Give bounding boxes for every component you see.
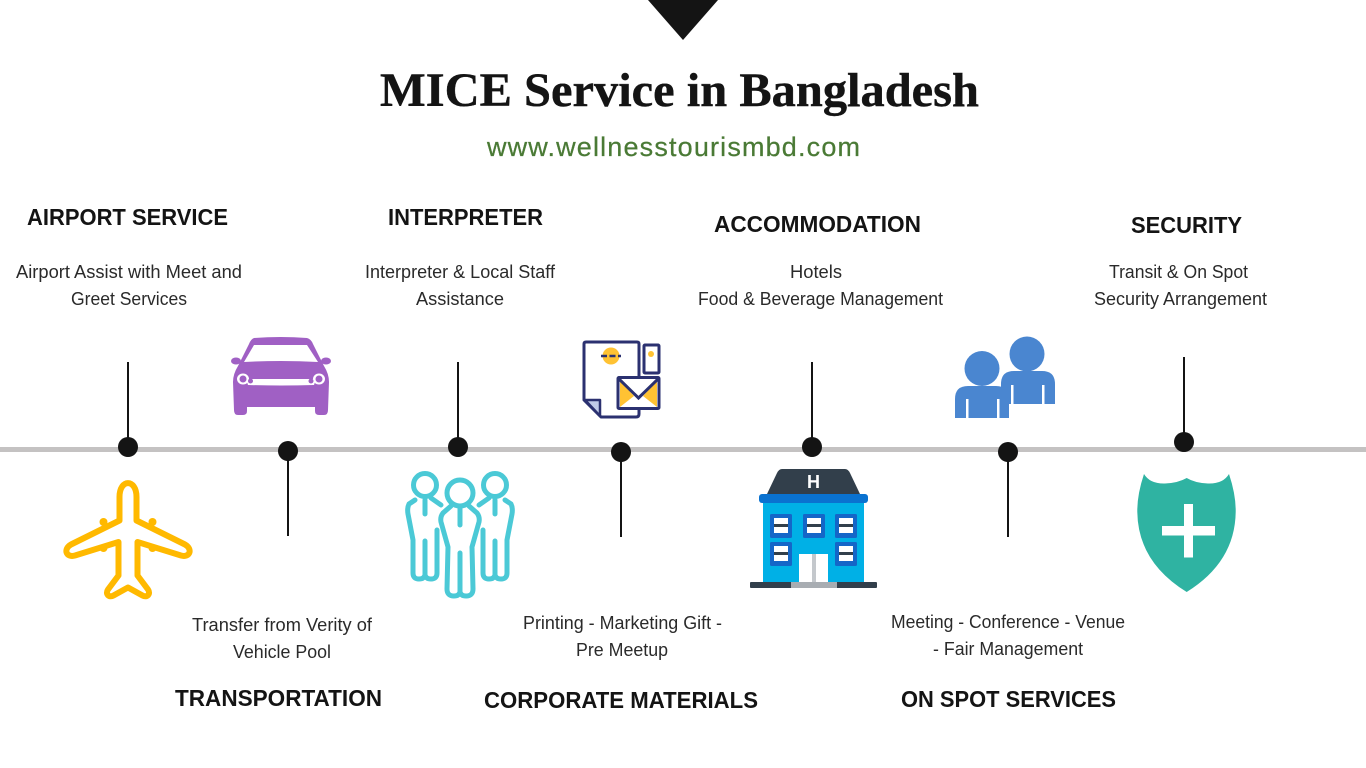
panel: security (1094, 212, 1267, 592)
text: corporate materials description (523, 613, 722, 660)
heading: airport service: AIRPORT SERVICE (27, 204, 228, 230)
timeline marker: on spot services (998, 442, 1018, 537)
timeline marker: transportation (278, 441, 298, 536)
heading: interpreter: INTERPRETER (388, 204, 543, 230)
text: on spot services description (891, 612, 1125, 659)
timeline marker: corporate materials (611, 442, 631, 537)
timeline marker: interpreter (448, 362, 468, 457)
panel: interpreter (365, 204, 556, 596)
text: transportation description: Vehicle Pool (233, 642, 331, 662)
text: corporate materials description: Pre Meetup (576, 640, 668, 660)
icon: hotel building: H (807, 472, 820, 492)
text: on spot services description: Meeting - Conference - Venue (891, 612, 1125, 632)
icon: group of people (408, 474, 512, 596)
top triangle marker (648, 0, 718, 40)
text: airport service description: Greet Services (71, 289, 187, 309)
heading: corporate materials: CORPORATE MATERIALS (484, 687, 758, 713)
text: transportation description (192, 615, 373, 662)
website url: www.wellnesstourismbd.com (486, 132, 860, 162)
timeline marker: accommodation (802, 362, 822, 457)
text: corporate materials description: Printing - Marketing Gift - (523, 613, 722, 633)
text: security description: Transit & On Spot (1109, 262, 1248, 282)
text: airport service description: Airport Assist with Meet and (16, 262, 242, 282)
text: interpreter description: Interpreter & Local Staff (365, 262, 556, 282)
panel: accommodation (698, 211, 943, 588)
panel: on spot services (891, 336, 1125, 712)
heading: on spot services: ON SPOT SERVICES (901, 686, 1116, 712)
text: on spot services description: - Fair Management (933, 639, 1083, 659)
timeline bar (0, 447, 1366, 452)
panel: transportation (175, 337, 382, 711)
text: interpreter description: Assistance (416, 289, 504, 309)
text: accommodation description: Hotels (790, 262, 842, 282)
heading: transportation: TRANSPORTATION (175, 685, 382, 711)
heading: accommodation: ACCOMMODATION (714, 211, 921, 237)
text: airport service description (16, 262, 242, 309)
icon: stationery and envelope (584, 342, 659, 417)
icon: shield with cross (1137, 474, 1236, 592)
panel: corporate materials (484, 342, 758, 713)
heading: security: SECURITY (1131, 212, 1242, 238)
text: accommodation description: Food & Beverage Management (698, 289, 943, 309)
timeline marker: airport service (118, 362, 138, 457)
text: transportation description: Transfer from Verity of (192, 615, 373, 635)
text: security description (1094, 262, 1267, 309)
title: MICE Service in Bangladesh (380, 64, 979, 117)
text: interpreter description (365, 262, 556, 309)
timeline marker: security (1174, 357, 1194, 452)
icon: two people (955, 336, 1055, 418)
text: security description: Security Arrangement (1094, 289, 1267, 309)
icon: airplane (66, 483, 190, 596)
text: accommodation description (698, 262, 943, 309)
icon: hotel building (750, 469, 877, 588)
icon: car (231, 337, 331, 415)
panel: airport service (16, 204, 242, 596)
